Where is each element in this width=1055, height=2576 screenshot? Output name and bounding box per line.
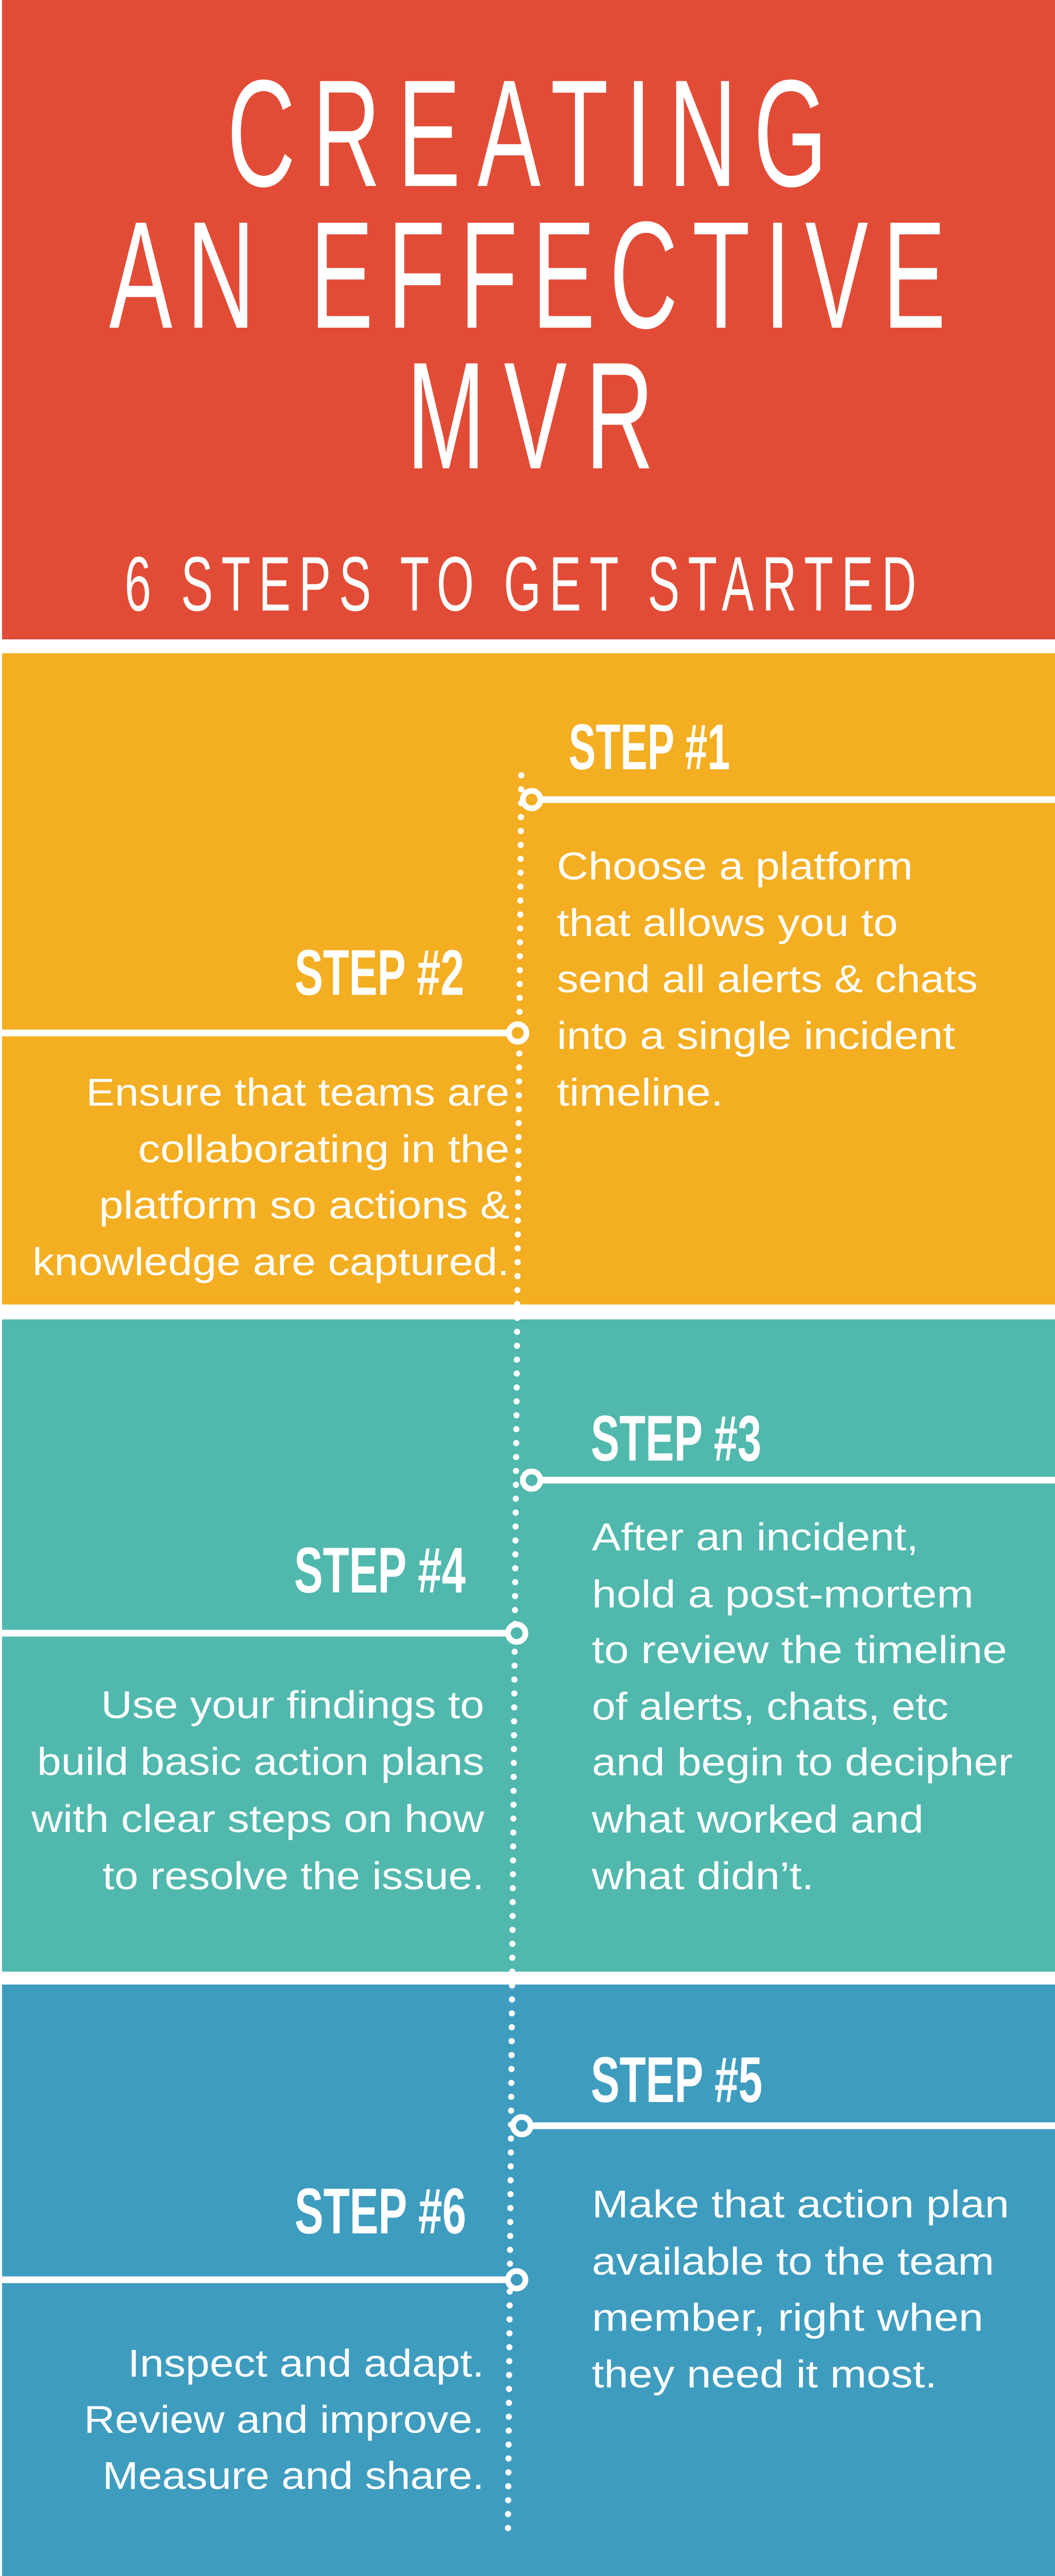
- step 1: STEP #1: [569, 711, 730, 783]
- step 1: [523, 711, 1055, 1114]
- step 6: Measure and share.: [103, 2454, 484, 2497]
- step 1: that allows you to: [557, 901, 898, 944]
- step 3: and begin to decipher: [592, 1740, 1013, 1784]
- step 1: into a single incident: [557, 1014, 955, 1057]
- step 5: member, right when: [592, 2296, 983, 2339]
- step 4: STEP #4: [294, 1535, 466, 1606]
- step 3: [523, 1403, 1055, 1897]
- step 5: they need it most.: [592, 2352, 937, 2396]
- title: CREATING: [227, 48, 827, 219]
- step 1: Choose a platform: [557, 844, 913, 888]
- title: MVR: [406, 331, 654, 501]
- step 1: timeline.: [557, 1071, 723, 1114]
- step 6: [2, 2176, 525, 2497]
- step 5: available to the team: [592, 2240, 994, 2283]
- dotted timeline: [508, 775, 521, 2533]
- step 5: Make that action plan: [592, 2182, 1009, 2226]
- step 2: platform so actions &: [99, 1183, 509, 1227]
- step 3: what didn’t.: [591, 1854, 814, 1897]
- step 2: STEP #2: [295, 937, 464, 1009]
- step 3: After an incident,: [592, 1515, 918, 1558]
- panel: steps 5-6: [2, 1985, 1055, 2576]
- step 6: Inspect and adapt.: [128, 2342, 484, 2385]
- step 6: Review and improve.: [84, 2398, 484, 2441]
- panel: header: [2, 0, 1055, 639]
- step 2: Ensure that teams are: [86, 1071, 509, 1114]
- step 6: STEP #6: [295, 2176, 466, 2247]
- step 3: to review the timeline: [592, 1628, 1007, 1671]
- step 3: STEP #3: [591, 1403, 761, 1475]
- step 5: STEP #5: [591, 2044, 762, 2116]
- step 3: hold a post-mortem: [592, 1572, 974, 1616]
- step 5: [513, 2044, 1055, 2396]
- panel: steps 1-2: [2, 653, 1055, 1304]
- step 4: build basic action plans: [37, 1740, 484, 1783]
- step 2: [2, 937, 526, 1283]
- title: [109, 48, 946, 501]
- subtitle: 6 STEPS TO GET STARTED: [125, 541, 916, 627]
- step 2: collaborating in the: [138, 1127, 509, 1171]
- panel: steps 3-4: [2, 1319, 1055, 1972]
- step 3: what worked and: [591, 1798, 924, 1841]
- step 4: with clear steps on how: [31, 1797, 485, 1840]
- step 4: to resolve the issue.: [103, 1854, 484, 1897]
- step 3: of alerts, chats, etc: [592, 1685, 948, 1728]
- title: AN EFFECTIVE: [109, 190, 946, 361]
- step 2: knowledge are captured.: [32, 1240, 509, 1283]
- step 4: [2, 1535, 525, 1897]
- step 1: send all alerts & chats: [557, 957, 978, 1001]
- step 4: Use your findings to: [101, 1683, 484, 1726]
